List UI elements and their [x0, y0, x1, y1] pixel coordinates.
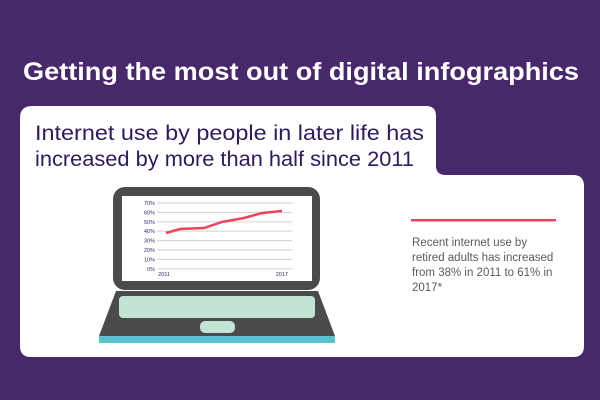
chart: line chart: 60% [144, 210, 155, 216]
heading [35, 122, 424, 171]
text block: stat [412, 237, 553, 294]
chart: line chart: 2011 [158, 272, 170, 278]
heading: increased by more than half since 2011 [35, 148, 414, 171]
text block: stat: Recent internet use by [412, 237, 527, 249]
chart: line chart: 30% [144, 239, 155, 245]
chart: line chart [144, 201, 292, 278]
chart: line chart: 20% [144, 248, 155, 254]
chart: line chart: 2017 [276, 272, 288, 278]
icon: laptop with chart [99, 187, 335, 343]
text block: stat: retired adults has increased [412, 252, 553, 264]
text block: stat: 2017* [412, 282, 443, 294]
chart: line chart: 10% [144, 257, 155, 263]
chart: line chart: 0% [147, 267, 155, 273]
chart: line chart: 70% [144, 201, 155, 207]
chart: line chart: 50% [144, 220, 155, 226]
divider line (red) [411, 219, 556, 222]
title: Getting the most out of digital infographics [23, 58, 579, 86]
chart: line chart: 40% [144, 229, 155, 235]
text block: stat: from 38% in 2011 to 61% in [412, 267, 552, 279]
panel: white card [20, 106, 584, 357]
heading: Internet use by people in later life has [35, 122, 424, 145]
